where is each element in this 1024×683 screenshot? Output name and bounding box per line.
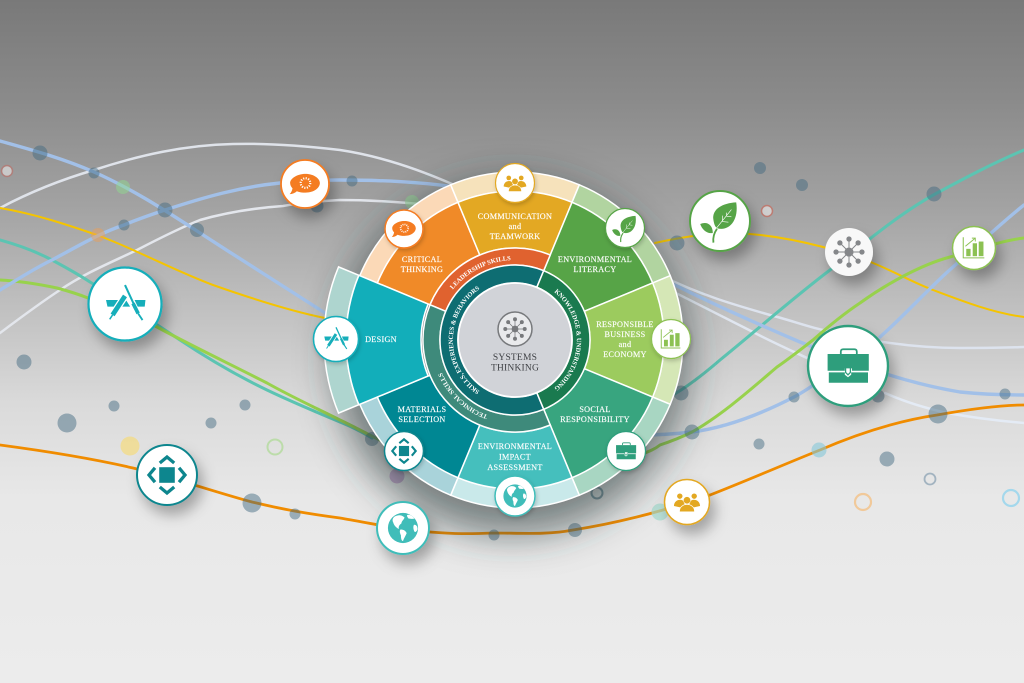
- segment: environmental impact assessment: [451, 425, 579, 508]
- yellow line right: [655, 233, 1024, 317]
- white line lower: [0, 200, 430, 333]
- ring label: knowledge and understanding: KNOWLEDGE & UNDERSTANDING: [554, 288, 582, 391]
- teal line right: [660, 150, 1024, 405]
- segment: social responsibility: [519, 344, 679, 504]
- blue line two left: [0, 180, 455, 290]
- ring label: technical skills: TECHNICAL SKILLS: [438, 373, 487, 420]
- wheel shadow: [334, 180, 690, 536]
- ring: technical skills: [423, 305, 550, 432]
- segment: responsible business and economy: [584, 276, 683, 404]
- label: materials selection: MATERIALS: [398, 405, 446, 414]
- label: social responsibility: SOCIAL: [579, 405, 611, 414]
- centre title: SYSTEMS: [493, 353, 537, 363]
- label: communication and teamwork: COMMUNICATION: [478, 212, 552, 221]
- wheel icon: design: [314, 316, 358, 362]
- ring: leadership skills: [430, 248, 550, 311]
- blue line one right: [640, 270, 1024, 395]
- ring: skills, experiences and behaviors: [440, 265, 544, 415]
- wheel icon: responsible business: [652, 320, 690, 358]
- blue line one left: [0, 141, 400, 360]
- floating icon: leaf: [690, 191, 750, 251]
- wheel icon: environmental impact: [495, 476, 535, 516]
- systems thinking wheel: [324, 172, 683, 508]
- centre disc: [458, 283, 572, 397]
- label: environmental impact assessment: IMPACT: [499, 452, 531, 462]
- teal line left: [0, 240, 372, 438]
- floating icon: globe: [377, 502, 429, 554]
- label: communication and teamwork: TEAMWORK: [490, 232, 540, 241]
- ring label: skills, experiences and behaviors: SKILLS, EXPERIENCES & BEHAVIORS: [448, 286, 480, 394]
- scattered translucent dots: [16, 146, 1010, 540]
- floating icon: bar chart: [952, 226, 996, 270]
- pale line far right: [885, 393, 1024, 423]
- ring label: leadership skills: LEADERSHIP SKILLS: [450, 256, 510, 290]
- white line upper: [0, 144, 452, 208]
- label: communication and teamwork: and: [509, 222, 521, 231]
- label: responsible business and economy: BUSINESS: [604, 330, 646, 339]
- segment: design (exploded): [324, 267, 428, 413]
- label: responsible business and economy: and: [619, 340, 631, 349]
- label: environmental impact assessment: ENVIRONMENTAL: [478, 442, 552, 451]
- coloured dots and rings: [2, 166, 1019, 520]
- label: materials selection: SELECTION: [398, 415, 446, 424]
- floating icon: briefcase: [808, 326, 888, 406]
- centre icon: hub: [498, 312, 532, 346]
- yellow line left: [0, 208, 325, 318]
- segment: communication and teamwork: [451, 172, 579, 255]
- orange line: [0, 405, 1024, 534]
- wheel icon: materials selection: [384, 432, 424, 470]
- label: environmental literacy: ENVIRONMENTAL: [558, 255, 632, 264]
- floating icon: people: [664, 480, 710, 524]
- flowing curved lines: [0, 141, 1024, 534]
- ring: knowledge and understanding: [537, 271, 590, 409]
- floating icon: materials arrows: [137, 445, 197, 505]
- segment: materials selection: [351, 355, 500, 504]
- floating icon: design tools: [88, 268, 162, 340]
- label: environmental impact assessment: ASSESSMENT: [487, 463, 543, 472]
- label: environmental literacy: LITERACY: [574, 265, 616, 274]
- blue line two right lower: [640, 386, 812, 435]
- label: responsible business and economy: ECONOMY: [603, 350, 647, 359]
- centre title: THINKING: [491, 364, 539, 374]
- blue line two right upper: [880, 205, 1024, 337]
- wheel icon: environmental literacy: [606, 208, 644, 248]
- floating icon: hub: [825, 228, 873, 276]
- wheel icon: social responsibility: [606, 432, 646, 470]
- label: social responsibility: RESPONSIBILITY: [560, 415, 630, 424]
- white line lower right: [660, 285, 807, 358]
- segment: environmental literacy: [519, 176, 679, 336]
- wheel icon: communication: [496, 164, 534, 202]
- floating icon: speech bubble: [281, 160, 329, 208]
- label: critical thinking: THINKING: [401, 265, 443, 274]
- wheel icon: critical thinking: [385, 210, 423, 248]
- label: critical thinking: CRITICAL: [402, 255, 442, 264]
- green line right: [640, 238, 1024, 455]
- segment: critical thinking: [351, 176, 500, 325]
- label: responsible business and economy: RESPONSIBLE: [596, 320, 654, 329]
- green line left: [0, 280, 380, 440]
- label: design: DESIGN: [365, 335, 397, 344]
- white line upper right: [660, 275, 1024, 348]
